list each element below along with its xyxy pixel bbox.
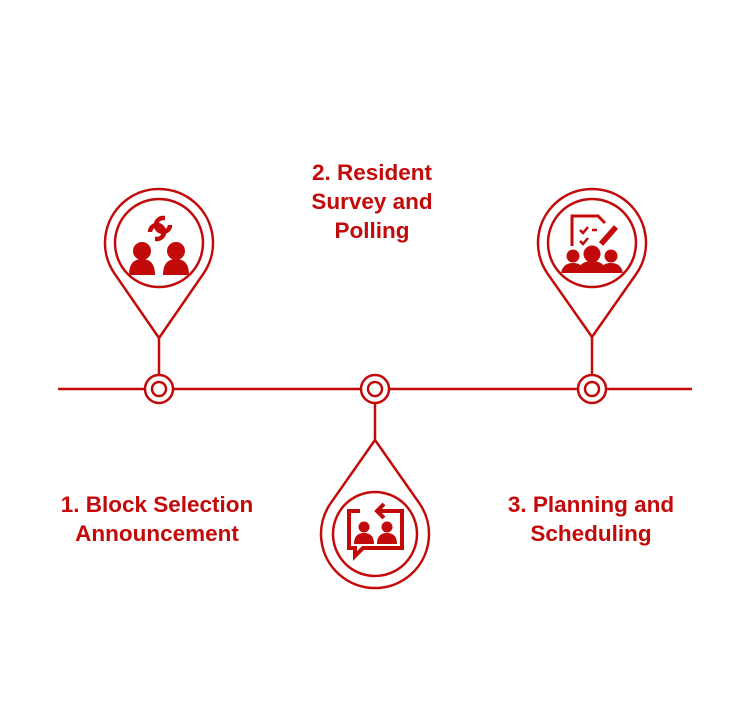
icon: checklist and team [561, 216, 623, 273]
label 2: Polling [334, 218, 410, 243]
pin 3 [538, 189, 646, 403]
label 3: Scheduling [530, 521, 652, 546]
icon: people with sync [129, 218, 189, 275]
timeline line [58, 388, 692, 390]
label 2: 2. Resident [312, 160, 432, 185]
label 3: 3. Planning and [508, 492, 674, 517]
label 3 [508, 492, 674, 546]
label 1 [61, 492, 253, 546]
label 1: Announcement [75, 521, 239, 546]
icon: chat with people [349, 504, 402, 556]
label 2 [311, 160, 433, 243]
label 2: Survey and [311, 189, 433, 214]
label 1: 1. Block Selection [61, 492, 253, 517]
pin 2 [321, 375, 429, 588]
pin 1 [105, 189, 213, 403]
